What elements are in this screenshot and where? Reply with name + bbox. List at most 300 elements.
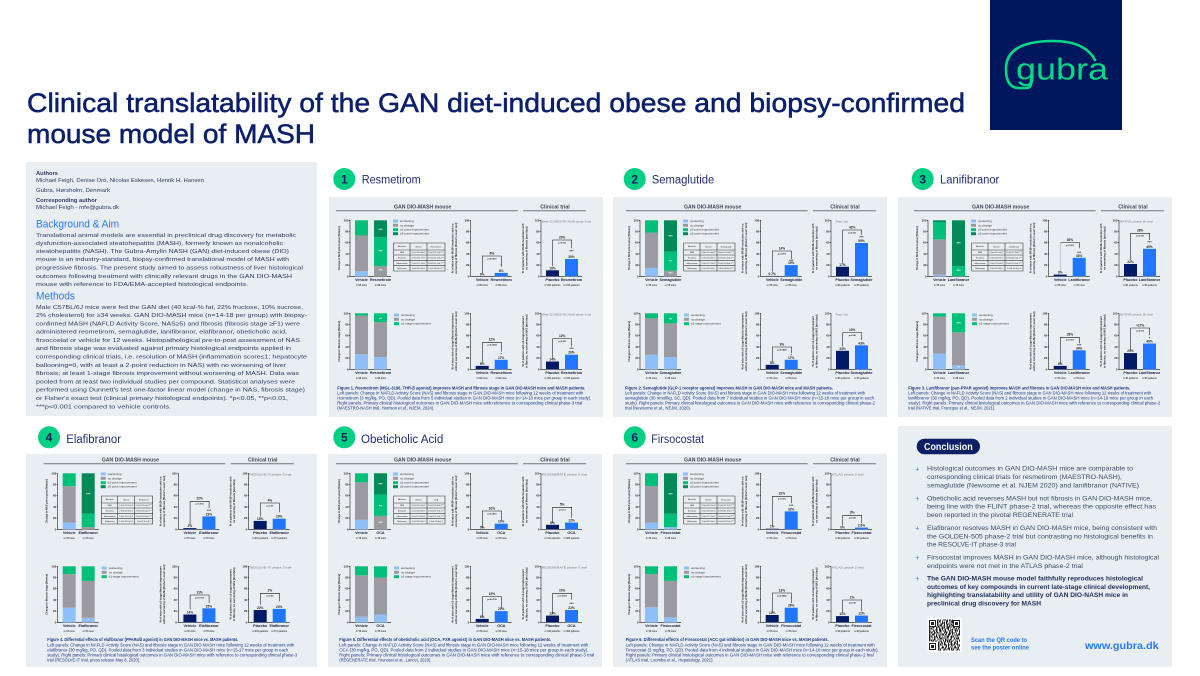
table: NAS components: 5.9±0.1/5.3±0.2 [412,252,426,254]
chart: NAS mouse endpoint: 100 [172,471,177,475]
chart: NAS mouse endpoint: p<0.001 [196,503,204,506]
chart: NAS clinical endpoint: 20 [826,516,830,520]
chart: fibrosis clinical endpoint: * [1149,336,1151,340]
chart: NAS mouse endpoint: 100 [464,218,470,222]
chart: NAS mouse endpoint: 32% [788,507,795,511]
chart: NAS mouse endpoint: *** [789,504,794,508]
chart: fibrosis clinical endpoint: 60 [536,334,540,338]
chart: NAS mouse endpoint: p=0.0061 [487,513,497,515]
chart: fibrosis mouse endpoint: 34% [1076,346,1083,350]
bullets: been reported in the pivotal REGENERATE trial [927,513,1073,519]
chart: fibrosis clinical endpoint: 100 [535,564,540,568]
chart: NAS mouse endpoint: 0 [468,274,470,278]
table: NAS components: 5.9±0.1/3.8±0.2*** [428,505,444,507]
chart: fibrosis mouse endpoint: 40 [174,598,177,602]
text: methods paragraph: 2% cholesterol) for ≥34 weeks. GAN DIO-MASH mice (n=14-18 per group) with biopsy- [36,313,307,319]
chart: fibrosis change stacked bars [915,311,970,380]
chart: fibrosis change stacked bars: 20 [923,356,927,360]
chart: fibrosis change stacked bars: n=78 mice [646,631,658,633]
chart: NAS mouse endpoint: 60 [756,494,760,498]
table: NAS components: 1.0±0.1/0.5±0.1** [428,268,444,270]
bullets: endpoints were not met in the ATLAS phase-2 trial [927,564,1083,570]
chart: NAS clinical endpoint: 40 [244,505,248,509]
chart: NAS clinical endpoint: 40 [826,252,830,256]
chart: fibrosis clinical endpoint: 40 [826,345,830,349]
chart: NAS clinical endpoint: 60 [536,494,540,498]
chart: NAS mouse endpoint: 20 [466,516,470,520]
legend: NAS: worsening [690,472,704,476]
chart: fibrosis mouse endpoint: Vehicle [766,371,779,375]
bullets: corresponding clinical trials for resmetirom (MAESTRO-NASH), [927,475,1122,481]
heading: Firsocostat: Firsocostat [651,434,705,446]
legend: NAS [393,219,429,236]
QR caption [971,638,1030,651]
chart: fibrosis change stacked bars: 40 [53,598,57,602]
chart: fibrosis change stacked bars: ** [669,317,672,321]
caption: figure 4: trial (RESOLVE-IT trial, press release May 8, 2020). [47,657,140,662]
legend: NAS: ≥2-point improvement [108,485,137,489]
caption: figure 5: Figure 5. Differential effects of obeticholic acid (OCA, FXR agonist) in GAN DIO-MASH mice vs. MASH patients. [339,637,551,642]
chart: NAS mouse endpoint: Firsocostat [781,531,802,535]
table: NAS components: Ballooning [687,268,697,270]
chart: NAS change stacked bars: 20 [635,263,639,267]
table: NAS components: Absolute [398,245,407,248]
chart: fibrosis change stacked bars: OCA [376,624,385,628]
chart: NAS clinical endpoint: *** [1147,240,1152,244]
bullets: the GOLDEN-505 phase-2 trial but contrasting no histological benefits in [927,534,1153,540]
chart: fibrosis change stacked bars: 20 [53,609,57,613]
table: NAS components: Inflammation [974,262,986,265]
authors block [36,171,204,211]
chart: NAS change stacked bars: 100 [51,471,57,475]
chart: fibrosis mouse endpoint: Vehicle [766,624,779,628]
chart: NAS clinical endpoint: 80 [1114,229,1118,233]
chart: NAS mouse endpoint: 22% [196,497,203,501]
chart: NAS change stacked bars: 100 [344,218,349,222]
chart: NAS clinical endpoint: n=83 patients [1142,284,1158,287]
chart: fibrosis mouse endpoint: without worsening of MASH [Fisher's exact test] [454,311,458,371]
table: NAS components: Vehicle [705,500,713,502]
chart: NAS change stacked bars: Vehicle [355,278,368,282]
chart: NAS mouse endpoint: Vehicle [766,278,779,282]
charts: Lanifibranor: GAN DIO-MASH mouse [972,205,1029,211]
charts: Firsocostat: GAN DIO-MASH mouse [684,458,741,464]
chart: NAS clinical endpoint: 15% [257,517,264,521]
chart: NAS mouse endpoint: Resmetirom [491,278,513,282]
chart: NAS change stacked bars: n=78 mice [64,538,76,540]
chart: fibrosis change stacked bars: * [87,618,89,622]
chart: NAS mouse endpoint: n=89 mice [477,285,489,287]
chart: fibrosis mouse endpoint: Semaglutide [780,371,802,375]
legend: NAS: no change [690,223,704,227]
chart: NAS mouse endpoint: 0 [758,274,760,278]
caption: figure 2: trial (Newsome et al., NEJM, 2020). [625,406,691,411]
chart: NAS clinical endpoint: p<0.001 [1136,235,1145,238]
bullets: The GAN DIO-MASH mouse model faithfully reproduces histological [927,577,1143,583]
chart: NAS change stacked bars: *** [378,482,383,486]
chart: fibrosis clinical endpoint: 80 [826,575,830,579]
chart: NAS clinical endpoint: *** [569,249,574,253]
chart: fibrosis mouse endpoint [741,311,802,380]
chart: fibrosis mouse endpoint: 80 [466,322,470,326]
chart: fibrosis change stacked bars: 60 [923,334,927,338]
chart: NAS change stacked bars: *** [378,228,383,232]
chart: fibrosis mouse endpoint: n=78 mice [1074,378,1086,380]
text: methods paragraph: ***p<0.001 compared to vehicle controls. [36,404,172,410]
chart: NAS mouse endpoint: Vehicle [476,278,489,282]
table: NAS components: 2.0±0.1/1.7±0.1 [119,516,134,518]
legend: NAS: no change [108,476,122,480]
chart: NAS mouse endpoint: 60 [1044,241,1048,245]
chart: NAS mouse endpoint [741,218,802,287]
table: NAS components: Steatosis [688,510,696,512]
table: NAS components [684,243,735,271]
chart: NAS clinical endpoint: 0% [840,525,845,529]
table: NAS components: NAS [400,251,405,254]
QR caption: see the poster online [971,645,1030,651]
chart: NAS clinical endpoint: p=0.06 [266,505,274,507]
chart: NAS change stacked bars: Change in NAS pre-to-post [%mice] [337,226,341,270]
chart: fibrosis mouse endpoint: 40 [466,345,470,349]
table: NAS components [972,243,1023,271]
table: NAS components: Absolute [106,498,114,501]
chart: fibrosis mouse endpoint: % of mice with ≥1-stage fibrosis improvement [451,313,455,369]
text: methods paragraph: administered resmetirom, semaglutide, lanifibranor, elafibranor, obeticholic acid, [36,330,288,336]
chart: NAS change stacked bars: 40 [635,252,639,256]
chart: fibrosis clinical endpoint: Lanifibranor [1139,371,1161,375]
caption: figure 4: study). Right panels: Primary clinical histological outcomes in GAN DIO-MASH mice with reference to corresponding clinical phase-3 [47,652,298,657]
chart: NAS mouse endpoint: worsening of fibrosis [Fisher's exact test] [454,476,458,527]
chart: NAS mouse endpoint: 20 [756,516,760,520]
heading: background and aim: Background & Aim [36,218,119,230]
chart: fibrosis mouse endpoint: Lanifibranor [1068,371,1091,375]
legend: NAS [101,472,137,489]
panel: 5 Obeticholic Acid [328,426,602,667]
chart: fibrosis change stacked bars: Vehicle [933,371,946,375]
chart: NAS change stacked bars: 80 [53,482,57,486]
chart: NAS mouse endpoint [451,218,513,287]
heading: Obeticholic Acid: 5 [341,431,348,445]
chart: fibrosis clinical endpoint: 20 [244,609,248,613]
chart: NAS clinical endpoint: 3% [850,511,855,515]
table: NAS components: 0.9±0.1/0.9±0.1 [702,268,716,270]
chart: fibrosis clinical endpoint: 10% [849,328,856,332]
chart: NAS clinical endpoint: 5% [560,503,565,507]
chart: fibrosis clinical endpoint: n=80 patients [835,377,851,380]
table: NAS components: Inflammation [686,262,698,265]
table: NAS components: Inflammation [104,515,115,518]
table: NAS components: 2.0±0.1/0.9±0.1*** [1006,263,1022,265]
chart: NAS mouse endpoint: n=78 mice [786,538,798,540]
chart: NAS clinical endpoint: 100 [825,218,830,222]
legend: fibrosis: worsening [979,313,993,317]
chart: NAS clinical endpoint: 12% [568,519,575,523]
chart: NAS clinical endpoint: Placebo [835,531,850,535]
chart: fibrosis change stacked bars: Change in fibrosis stage [%mice] [627,321,631,362]
chart: fibrosis clinical endpoint: in fibrosis, no worsening of NAS [trial data] [524,315,528,368]
chart: fibrosis mouse endpoint: 40 [756,345,760,349]
chart: fibrosis change stacked bars: 80 [923,322,927,326]
chart: fibrosis mouse endpoint: p=0.0128 [487,599,497,601]
chart: NAS change stacked bars: 60 [635,494,639,498]
panel: conclusion [898,426,1172,667]
chart: fibrosis mouse endpoint: Vehicle [184,624,196,628]
chart: fibrosis mouse endpoint [158,564,219,633]
chart: fibrosis clinical endpoint: p=0.011 [1136,330,1145,332]
table: NAS components: 5.9±0.1/5.1±0.2 [990,252,1004,254]
chart: NAS change stacked bars: 80 [635,482,639,486]
chart: NAS mouse endpoint: 100 [464,471,470,475]
chart: NAS clinical endpoint: 80 [536,482,540,486]
chart: NAS mouse endpoint: 100 [1042,218,1048,222]
chart: NAS clinical endpoint: 10% [549,266,556,270]
chart: fibrosis mouse endpoint: 17% [788,356,795,360]
caption: figure 2: study). Right panels: Primary clinical histological outcomes in GAN DIO-MASH mice with reference to corresponding clinical phase-2 [625,401,876,406]
chart: fibrosis clinical endpoint: Elafibranor [269,624,289,628]
text: methods paragraph: firsocostat or vehicle for 12 weeks. Histopathological pre-to-post assessment of NAS [36,338,300,344]
chart: NAS change stacked bars: 100 [344,471,349,475]
chart: NAS clinical endpoint: n=311 patients [545,537,561,540]
chart: NAS mouse endpoint: 15% [788,261,795,265]
legend: fibrosis: no change [401,570,415,574]
charts: Elafibranor: GAN DIO-MASH mouse [102,458,159,464]
chart: fibrosis clinical endpoint: n=311 patients [545,630,561,633]
chart: NAS mouse endpoint [1029,218,1091,287]
chart: NAS clinical endpoint: 100 [825,471,830,475]
chart: NAS clinical endpoint: 2.6% [858,524,865,528]
conclusion pill heading [917,439,980,454]
chart: NAS clinical endpoint: no worsening of fibrosis [trial data] [1102,226,1106,270]
logo: gubra [990,0,1122,130]
chart: fibrosis mouse endpoint: Firsocostat [781,624,802,628]
chart: NAS clinical endpoint: 20 [244,516,248,520]
table: NAS components: Inflammation [686,515,698,518]
chart: NAS change stacked bars: n=78 mice [665,538,677,540]
charts: Firsocostat [626,458,876,633]
chart: NAS clinical endpoint: Firsocostat [852,531,872,535]
chart: fibrosis mouse endpoint: p=0.0384 [487,344,497,347]
chart: NAS change stacked bars: 80 [923,229,927,233]
chart: NAS clinical endpoint: Placebo [253,531,268,535]
chart: NAS clinical endpoint: 17% [839,263,846,267]
chart: fibrosis mouse endpoint: 0 [758,620,760,624]
chart: fibrosis change stacked bars: Change in fibrosis stage [%mice] [337,321,341,362]
panel: 6 Firsocostat [613,426,887,667]
chart: NAS mouse endpoint: 0% [480,525,485,529]
chart: fibrosis mouse endpoint: n=78 mice [786,378,798,380]
chart: fibrosis mouse endpoint: n=78 mice [786,631,798,633]
chart: fibrosis clinical endpoint: n=81 patients [1123,377,1139,380]
charts: Resmetirom: GAN DIO-MASH mouse [394,205,451,211]
chart: NAS mouse endpoint: % of mice with MASH resolution with no [741,476,745,526]
chart: NAS change stacked bars: 100 [634,218,639,222]
chart: fibrosis clinical endpoint: p=0.94 [849,601,856,604]
heading: Firsocostat [624,426,705,448]
charts: Obeticholic Acid: GAN DIO-MASH mouse [394,458,451,464]
text: methods paragraph: Male C57BL/6J mice were fed the GAN diet (40 kcal-% fat, 22% fructose, 10% sucrose, [36,305,304,311]
charts: Semaglutide: GAN DIO-MASH mouse [684,205,741,211]
caption: figure 1: (MAESTRO-NASH trial, Harrison et al., NJEM, 2024). [337,406,434,411]
chart: fibrosis clinical endpoint: 100 [535,311,540,315]
chart: fibrosis mouse endpoint: 100 [754,311,760,315]
table: NAS components: 2.9±0.0/2.6±0.1 [119,510,134,512]
chart: NAS clinical endpoint: 60 [536,241,540,245]
chart: NAS clinical endpoint: 0 [538,274,540,278]
chart: fibrosis mouse endpoint: 100 [464,564,470,568]
chart: NAS clinical endpoint: 100 [242,471,248,475]
table: NAS components: 1.0±0.1/0.9±0.1 [412,521,426,523]
table: NAS components: 2.0±0.1/1.3±0.1*** [428,516,444,518]
legend: fibrosis [394,566,431,579]
table: NAS components: Semaglutide [720,246,732,248]
chart: fibrosis mouse endpoint: 0 [468,620,470,624]
legend: fibrosis: worsening [401,313,415,317]
chart: NAS clinical endpoint: Semaglutide [851,278,872,282]
chart: NAS mouse endpoint: 31% [779,492,785,496]
chart: NAS mouse endpoint: n=78 mice [184,538,196,540]
chart: fibrosis clinical endpoint: 26% [568,351,575,355]
chart: NAS change stacked bars: *** [668,492,673,496]
chart: NAS mouse endpoint: worsening of fibrosis [Fisher's exact test] [744,223,748,274]
chart: fibrosis clinical endpoint [1099,311,1161,380]
chart: NAS change stacked bars: 20 [923,263,927,267]
chart: NAS mouse endpoint: % of mice with MASH resolution with no [741,223,745,273]
chart: fibrosis mouse endpoint: *** [1077,343,1082,347]
bullets: Obeticholic acid reverses MASH but not fibrosis in GAN DIO-MASH mice, [927,496,1152,502]
legend: fibrosis [102,566,139,579]
chart: NAS clinical endpoint: n=39 patients [854,537,870,540]
chart: fibrosis mouse endpoint: OCA [497,624,506,628]
chart: fibrosis change stacked bars: Vehicle [645,624,658,628]
chart: fibrosis mouse endpoint: p=0.0716 [195,597,205,599]
chart: fibrosis mouse endpoint: 60 [174,587,177,591]
charts: Resmetirom: Clinical trial [540,205,570,211]
chart: fibrosis change stacked bars: 100 [344,564,349,568]
chart: NAS clinical endpoint: 59% [858,239,865,243]
charts: Obeticholic Acid [336,458,587,633]
panel: authors, background and methods [26,162,317,416]
table: NAS components: 2.0±0.1/1.7±0.1 [702,516,716,518]
chart: NAS change stacked bars: Change in NAS pre-to-post [%mice] [627,226,631,270]
legend: NAS: ≥2-point improvement [978,232,1007,236]
charts: Lanifibranor [914,205,1164,380]
table: NAS components: 1.0±0.1/0.5±0.1*** [718,521,734,523]
chart: NAS clinical endpoint: n=361 patients [252,537,269,540]
caption: figure 3: lanifibranor (30 mg/kg, PO, QD). Pooled data from 2 individual studies in GAN DIO-MASH mice (n=14-18 mice per group in each [908,396,1154,401]
table: NAS components: Vehicle [123,500,130,502]
chart: fibrosis clinical endpoint: 0 [1116,367,1118,371]
chart: fibrosis mouse endpoint [451,311,513,380]
chart: fibrosis change stacked bars: n=98 mice [356,378,368,380]
chart: NAS mouse endpoint: n=78 mice [496,538,508,540]
table: NAS components: 2.9±0.0/1.4±0.2*** [718,510,734,512]
chart: fibrosis mouse endpoint: 8% [770,361,775,365]
chart: NAS clinical endpoint: RESOLVE-IT phase 3 trial [249,472,292,476]
caption: figure 6: (ATLAS trial, Loomba et al., Hepatology, 2021). [626,657,714,662]
chart: fibrosis clinical endpoint: n=308 patients [563,630,580,633]
chart: fibrosis clinical endpoint: 60 [1114,334,1118,338]
chart: NAS mouse endpoint: Vehicle [1054,278,1067,282]
chart: fibrosis clinical endpoint: 40 [244,598,248,602]
chart: NAS change stacked bars: 0 [925,274,927,278]
chart: NAS clinical endpoint: % of patients with MASH resolution with [811,476,815,526]
bullets: + [915,466,919,474]
charts: Firsocostat: Clinical trial [830,458,860,464]
legend: fibrosis: ≥1-stage improvement [691,322,721,326]
chart: NAS change stacked bars: n=78 mice [953,285,965,287]
chart: NAS mouse endpoint: 0.7% [769,272,776,276]
text: background paragraph: progressive fibrosis. The present study aimed to assess robustness of liver histological [36,266,303,272]
chart: NAS clinical endpoint: no worsening of fibrosis [trial data] [814,226,818,270]
table: NAS components: 0.9±0.1/0.4±0.1** [718,268,734,270]
chart: NAS change stacked bars: Change in NAS pre-to-post [%mice] [915,226,919,270]
chart: NAS clinical endpoint: 100 [535,218,540,222]
table: NAS components: 2.9±0.0/2.6±0.1 [702,510,716,512]
chart: NAS clinical endpoint: Placebo [835,278,850,282]
chart: fibrosis change stacked bars: Change in fibrosis stage [%mice] [337,574,341,615]
chart: NAS clinical endpoint: 80 [536,229,540,233]
chart: fibrosis change stacked bars: 60 [345,334,349,338]
table: NAS components: 2.9±0.0/1.5±0.2*** [136,510,152,512]
title [27,88,965,149]
chart: fibrosis mouse endpoint: % of mice with ≥1-stage fibrosis improvement [451,566,455,622]
chart: fibrosis change stacked bars: n=98 mice [375,378,387,380]
chart: fibrosis clinical endpoint: 0 [538,620,540,624]
bullets [915,466,1159,608]
chart: fibrosis clinical endpoint: 11% [839,612,846,616]
chart: NAS clinical endpoint: 80 [826,482,830,486]
table: NAS components: 5.9±0.1/3.2±0.2*** [428,252,444,254]
heading: Resmetirom: Resmetirom [362,175,421,187]
chart: fibrosis clinical endpoint: p=0.42 [266,595,274,598]
chart: fibrosis mouse endpoint: 60 [466,587,470,591]
chart: fibrosis clinical endpoint: REGENERATE phase 3 trial [542,565,587,569]
QR caption: Scan the QR code to [971,638,1027,644]
chart: fibrosis change stacked bars: Vehicle [355,624,368,628]
charts: Elafibranor: Clinical trial [248,458,278,464]
table: NAS components: 1.0±0.1/0.6±0.1 [137,521,152,523]
chart: NAS mouse endpoint: 100 [754,218,760,222]
chart: NAS mouse endpoint: 10% [498,520,505,524]
chart: fibrosis change stacked bars: Elafibranor [78,624,98,628]
chart: fibrosis clinical endpoint: 33% [839,347,846,351]
chart: fibrosis clinical endpoint: 10% [559,589,566,593]
chart: NAS change stacked bars: 80 [635,229,639,233]
chart: NAS clinical endpoint: p<0.001 [848,231,857,234]
QR code [928,618,962,652]
chart: fibrosis clinical endpoint: RESOLVE-IT phase 3 trial [249,565,292,569]
table: NAS components: 2.9±0.0/1.9±0.1*** [428,510,444,512]
chart: fibrosis change stacked bars: Firsocostat [661,624,681,628]
chart: NAS change stacked bars: *** [668,271,673,275]
chart: NAS change stacked bars: 80 [345,229,349,233]
chart: fibrosis change stacked bars: 0 [637,620,639,624]
chart: fibrosis change stacked bars: 0 [347,367,349,371]
chart: NAS clinical endpoint: 100 [535,471,540,475]
chart: NAS clinical endpoint: % of patients with MASH resolution with [521,223,525,273]
caption: figure 5 [339,637,594,662]
chart: NAS change stacked bars: 60 [53,494,57,498]
chart: NAS clinical endpoint: p<0.001 [558,241,567,244]
chart: NAS mouse endpoint: % of mice with MASH resolution with no [451,223,455,273]
chart: NAS clinical endpoint: 20 [536,516,540,520]
table: NAS components: NAS [690,504,695,507]
chart: NAS mouse endpoint: 14% [779,246,785,250]
chart: fibrosis change stacked bars: 80 [345,575,349,579]
chart: fibrosis clinical endpoint: 40 [826,598,830,602]
charts: Semaglutide [626,205,876,380]
chart: fibrosis change stacked bars: 0 [925,367,927,371]
